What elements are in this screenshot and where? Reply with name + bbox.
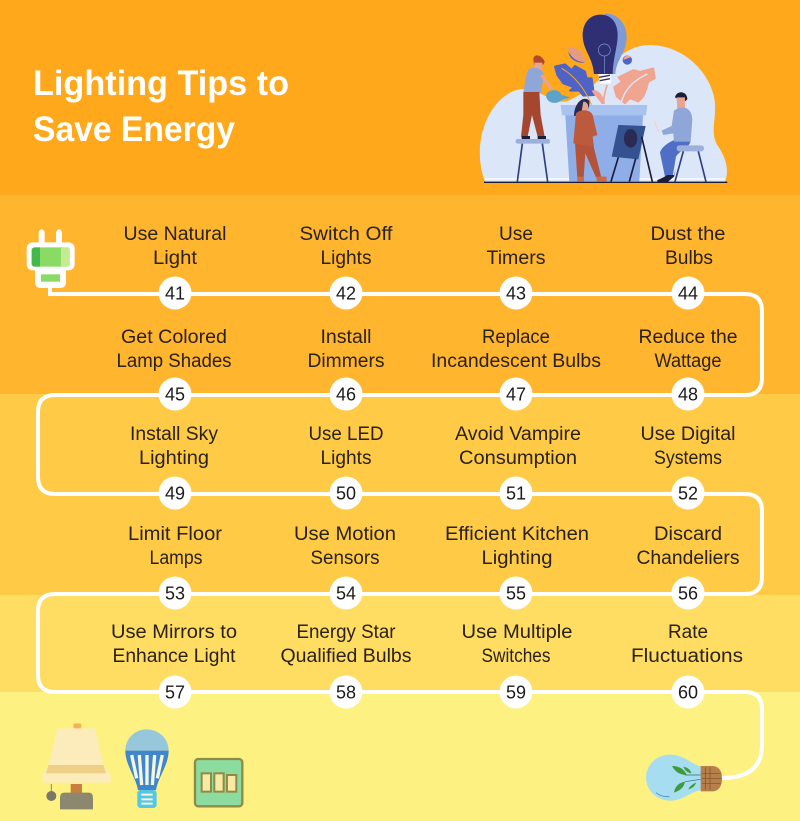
icon: power plug — [27, 229, 75, 288]
tips row 2: Install — [320, 327, 372, 348]
standing woman — [573, 99, 607, 182]
light bulb — [583, 13, 627, 83]
title: Save Energy — [33, 110, 236, 149]
tips row 5: Fluctuations — [631, 646, 743, 667]
easel with bulb sketch — [611, 125, 652, 182]
numbers: 55 — [506, 584, 526, 604]
tips row 3: Use Digital — [640, 424, 736, 445]
blue leaves — [555, 47, 594, 105]
tips row 5: Enhance Light — [112, 646, 236, 667]
tips row 5 — [111, 622, 743, 667]
tips row 5: Qualified Bulbs — [280, 646, 412, 667]
icon: eco light bulb with leaves — [646, 755, 722, 801]
tips row 4: Sensors — [310, 548, 380, 569]
numbers: 54 — [336, 584, 356, 604]
tips row 2: Wattage — [654, 351, 722, 372]
band: footer — [0, 692, 800, 821]
tips row 2: Lamp Shades — [116, 351, 232, 372]
numbers: 47 — [506, 384, 526, 404]
tips row 3: Install Sky — [130, 424, 218, 445]
tips row 1: Use — [499, 224, 533, 245]
numbers: 43 — [506, 284, 526, 304]
tips row 2 — [116, 327, 738, 372]
tips row 4: Lamps — [150, 548, 202, 569]
numbers: 57 — [165, 682, 185, 702]
tips row 1 — [124, 224, 726, 269]
tips row 1: Lights — [320, 248, 372, 269]
numbers — [165, 284, 698, 702]
seated man with laptop — [654, 92, 706, 182]
numbers: 60 — [678, 682, 698, 702]
tips row 3: Lighting — [139, 448, 209, 469]
numbers: 52 — [678, 484, 698, 504]
tips row 5: Rate — [668, 622, 708, 643]
icon: LED bulb — [125, 729, 169, 808]
numbers: 53 — [165, 584, 185, 604]
numbers: 42 — [336, 284, 356, 304]
background blob — [480, 45, 727, 182]
title: Lighting Tips to — [33, 64, 289, 103]
title — [33, 64, 289, 149]
tips row 4: Discard — [654, 524, 722, 545]
numbers: 56 — [678, 584, 698, 604]
band: tips 49-56 — [0, 394, 800, 595]
tips row 3 — [130, 424, 736, 469]
numbers: 48 — [678, 384, 698, 404]
tips row 3: Lights — [320, 448, 372, 469]
number markers — [158, 276, 704, 708]
pink leaves — [592, 55, 655, 105]
tips row 5: Switches — [482, 646, 550, 667]
tips row 4: Chandeliers — [636, 548, 740, 569]
numbers: 50 — [336, 484, 356, 504]
tips row 4: Efficient Kitchen — [445, 524, 589, 545]
tips row 2: Dimmers — [308, 351, 384, 372]
tips row 1: Bulbs — [665, 248, 713, 269]
numbers: 58 — [336, 682, 356, 702]
stool — [516, 139, 550, 144]
plant pot — [561, 105, 647, 182]
tips row 5: Energy Star — [296, 622, 396, 643]
numbers: 59 — [506, 682, 526, 702]
tips row 3: Consumption — [459, 448, 577, 469]
tips row 1: Use Natural — [124, 224, 226, 245]
band: tips 57-60 — [0, 595, 800, 692]
tips row 5: Use Multiple — [462, 622, 572, 643]
tips row 5: Use Mirrors to — [111, 622, 237, 643]
tips row 1: Timers — [486, 248, 546, 269]
band: tips 41-48 — [0, 195, 800, 394]
numbers: 51 — [506, 484, 526, 504]
tips row 2: Get Colored — [121, 327, 227, 348]
ground lines — [485, 177, 725, 181]
numbers: 41 — [165, 284, 185, 304]
numbers: 45 — [165, 384, 185, 404]
tips row 3: Avoid Vampire — [455, 424, 581, 445]
tips row 2: Replace — [482, 327, 550, 348]
tips row 4: Lighting — [482, 548, 552, 569]
icon: light switch panel — [195, 759, 242, 806]
tips row 1: Switch Off — [300, 224, 393, 245]
tips row 2: Reduce the — [638, 327, 738, 348]
tips row 1: Dust the — [650, 224, 726, 245]
tips row 2: Incandescent Bulbs — [431, 351, 601, 372]
tips row 3: Systems — [654, 448, 722, 469]
tips row 1: Light — [153, 248, 198, 269]
numbers: 46 — [336, 384, 356, 404]
numbers: 49 — [165, 484, 185, 504]
icon: table lamp — [43, 723, 111, 809]
illustration: team growing a light bulb plant — [480, 13, 727, 182]
tips row 4: Limit Floor — [128, 524, 223, 545]
tips row 4 — [128, 524, 740, 569]
tips row 3: Use LED — [308, 424, 384, 445]
numbers: 44 — [678, 284, 698, 304]
watering can — [546, 90, 571, 103]
tips row 4: Use Motion — [294, 524, 396, 545]
connector path — [38, 286, 762, 778]
header band — [0, 0, 800, 195]
woman on stool watering — [516, 55, 571, 182]
